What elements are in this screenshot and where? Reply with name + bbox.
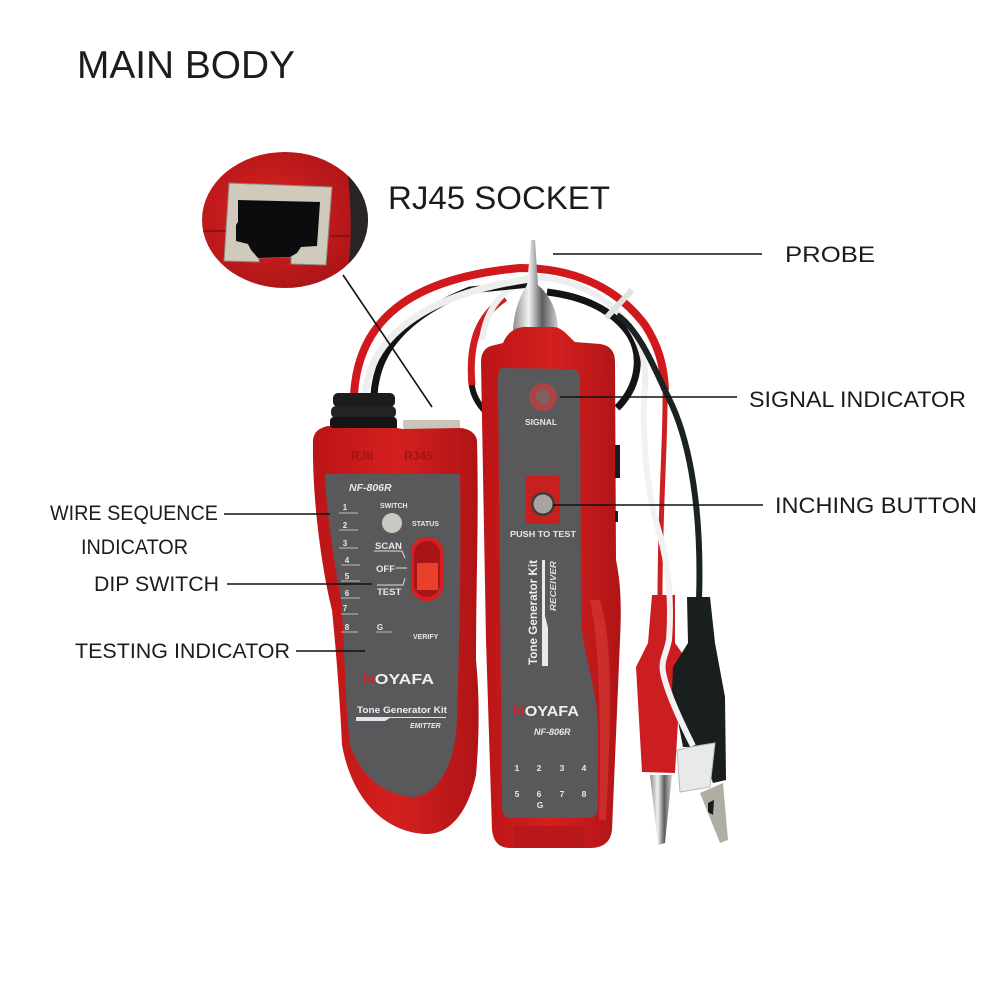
wire sequence digits: 5 (345, 572, 350, 581)
signal indicator (529, 383, 557, 411)
socket labels: RJ45 (404, 449, 433, 463)
probe (513, 240, 558, 330)
DIP switch slot (411, 537, 443, 601)
label: inching button: INCHING BUTTON (775, 493, 977, 518)
wire sequence digits: 1 (343, 503, 348, 512)
crocodile clip: red (636, 595, 682, 845)
kit name: Tone Generator Kit (357, 705, 448, 716)
cable loop (354, 268, 665, 410)
switch button (382, 513, 402, 533)
label: testing indicator: TESTING INDICATOR (75, 639, 290, 663)
receiver digits: 2 (537, 763, 542, 773)
callout: probe (553, 253, 762, 255)
wire sequence digits: 6 (345, 589, 350, 598)
vertical divider (542, 560, 548, 666)
receiver digits: 8 (582, 789, 587, 799)
RJ11 plug (677, 743, 715, 792)
label: DIP switch: DIP SWITCH (94, 572, 219, 596)
receiver unit (481, 327, 621, 848)
receiver digits: 6 (537, 789, 542, 799)
digit underlines (339, 513, 392, 632)
emitter logo: NOYAFA (362, 671, 434, 688)
callout: DIP switch (227, 583, 372, 585)
callout: wire sequence indicator (224, 513, 330, 515)
heading: RJ45 socket: RJ45 SOCKET (388, 180, 610, 216)
receiver body (481, 327, 621, 848)
label: signal indicator: SIGNAL INDICATOR (749, 387, 966, 412)
position labels (375, 541, 402, 598)
push to test label: PUSH TO TEST (510, 529, 577, 539)
RJ45 port (403, 420, 460, 429)
receiver digits: 5 (515, 789, 520, 799)
receiver digits: G (537, 800, 544, 810)
label: wire sequence indicator: WIRE SEQUENCE (50, 501, 218, 525)
callout: RJ45 socket (343, 275, 432, 407)
receiver highlight (590, 600, 610, 820)
emitter grey panel (325, 474, 460, 797)
crocodile clip: black (672, 597, 728, 843)
receiver digits: 3 (560, 763, 565, 773)
zip tie (606, 290, 632, 318)
receiver logo: NOYAFA (513, 703, 579, 720)
receiver grey panel (498, 368, 598, 818)
label: wire sequence indicator: INDICATOR (81, 535, 188, 559)
wire: white lead (644, 385, 693, 746)
inset: RJ45 socket close-up (200, 150, 372, 292)
wire sequence digits: 7 (343, 604, 348, 613)
receiver digits: 1 (515, 763, 520, 773)
wire sequence digits: 4 (345, 556, 350, 565)
cable grommet (330, 393, 397, 431)
callout: inching button (553, 504, 763, 506)
vertical kit name: Tone Generator Kit (528, 560, 540, 665)
receiver model: NF-806R (534, 727, 571, 737)
socket labels: RJII (351, 449, 373, 463)
switch labels: VERIFY (413, 634, 439, 641)
title: MAIN BODY (77, 44, 295, 87)
receiver label: RECEIVER (549, 561, 558, 611)
wire sequence digits: 2 (343, 521, 348, 530)
receiver digits: 4 (582, 763, 587, 773)
label: wire sequence indicator (50, 501, 218, 559)
inching button (526, 476, 560, 524)
side switches (615, 445, 620, 522)
switch labels: STATUS (412, 521, 439, 528)
switch labels (380, 503, 439, 641)
wire sequence digits: 8 (345, 623, 350, 632)
position labels: OFF (376, 564, 395, 575)
emitter label: EMITTER (410, 723, 441, 730)
wire: red lead (660, 385, 665, 600)
emitter unit (313, 393, 479, 834)
model name: NF-806R (349, 482, 392, 494)
receiver digits (515, 763, 587, 810)
position labels: TEST (377, 587, 401, 598)
position labels: SCAN (375, 541, 402, 552)
wire sequence digits: 3 (343, 539, 348, 548)
wire sequence digits (343, 503, 383, 632)
battery cover (514, 826, 584, 848)
receiver digits: 7 (560, 789, 565, 799)
signal label: SIGNAL (525, 417, 557, 427)
emitter body (313, 426, 479, 834)
position lines (374, 551, 407, 585)
socket labels (351, 449, 433, 463)
label: probe: PROBE (785, 242, 875, 267)
switch labels: SWITCH (380, 503, 408, 510)
wire: black lead (617, 315, 699, 600)
callout: testing indicator (296, 650, 365, 652)
kit divider (356, 717, 446, 721)
wire sequence digits: G (377, 623, 383, 632)
callout: signal indicator (560, 396, 737, 398)
